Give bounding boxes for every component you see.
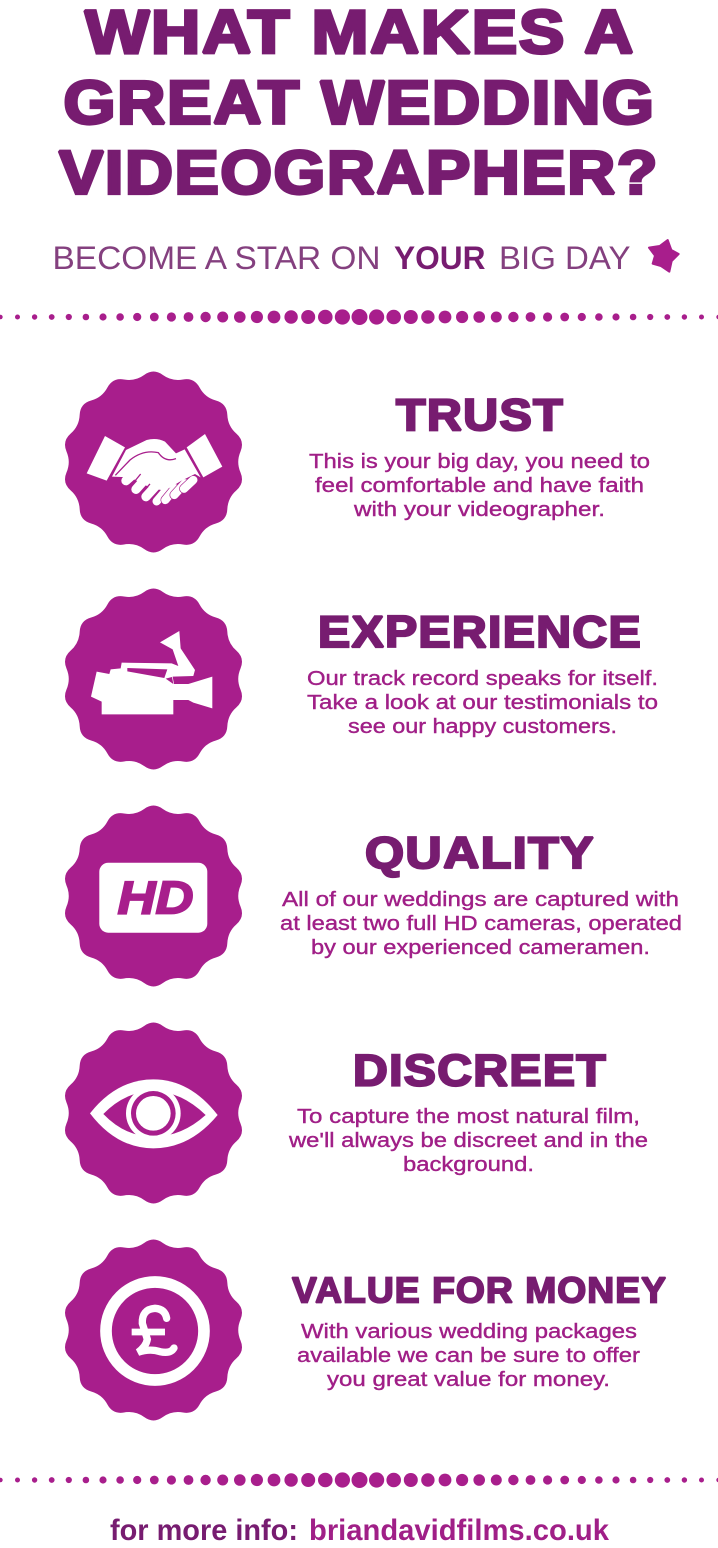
- body text: [307, 667, 658, 738]
- body text: This is your big day, you need to: [309, 450, 650, 473]
- title: VIDEOGRAPHER?: [59, 138, 659, 206]
- body text: available we can be sure to offer: [297, 1344, 640, 1367]
- top dotted divider: [0, 309, 718, 325]
- body text: [280, 888, 682, 959]
- panel: quality: [65, 806, 682, 986]
- panel: discreet: [65, 1023, 648, 1203]
- body text: by our experienced cameramen.: [311, 936, 650, 959]
- body text: we'll always be discreet and in the: [288, 1129, 648, 1152]
- body text: [297, 1320, 640, 1391]
- body text: Take a look at our testimonials to: [307, 691, 658, 714]
- badge: pound: [65, 1240, 242, 1420]
- footer: [110, 1514, 609, 1547]
- body text: with your videographer.: [353, 498, 605, 521]
- panel: value for money: [65, 1240, 667, 1420]
- title: WHAT MAKES A: [85, 0, 635, 66]
- heading: EXPERIENCE: [318, 608, 642, 657]
- body text: background.: [403, 1153, 534, 1176]
- badge: HD: [65, 806, 242, 986]
- heading: TRUST: [396, 391, 564, 440]
- body text: To capture the most natural film,: [297, 1105, 640, 1128]
- badge: video camera: [65, 589, 242, 769]
- heading: VALUE FOR MONEY: [292, 1270, 667, 1310]
- body text: All of our weddings are captured with: [282, 888, 679, 911]
- footer: for more info:: [110, 1514, 298, 1547]
- panel: experience: [65, 589, 658, 769]
- subtitle: [52, 240, 630, 276]
- body text: With various wedding packages: [301, 1320, 637, 1343]
- body text: feel comfortable and have faith: [315, 474, 644, 497]
- heading: QUALITY: [365, 829, 595, 878]
- title: GREAT WEDDING: [64, 68, 656, 136]
- body text: at least two full HD cameras, operated: [280, 912, 682, 935]
- badge: handshake: [65, 372, 242, 552]
- title: [59, 0, 659, 206]
- heading: DISCREET: [353, 1046, 607, 1096]
- badge: HD: HD: [118, 872, 194, 924]
- body text: [309, 450, 650, 521]
- body text: Our track record speaks for itself.: [307, 667, 658, 690]
- badge: eye: [65, 1023, 242, 1203]
- body text: you great value for money.: [327, 1368, 610, 1391]
- subtitle: BECOME A STAR ON: [52, 240, 380, 276]
- panel: trust: [65, 372, 650, 552]
- icon: star: [649, 240, 679, 272]
- body text: [288, 1105, 648, 1176]
- bottom dotted divider: [0, 1472, 718, 1488]
- footer: briandavidfilms.co.uk: [309, 1514, 609, 1547]
- body text: see our happy customers.: [348, 715, 617, 738]
- subtitle: BIG DAY: [499, 240, 630, 276]
- subtitle: YOUR: [394, 240, 486, 276]
